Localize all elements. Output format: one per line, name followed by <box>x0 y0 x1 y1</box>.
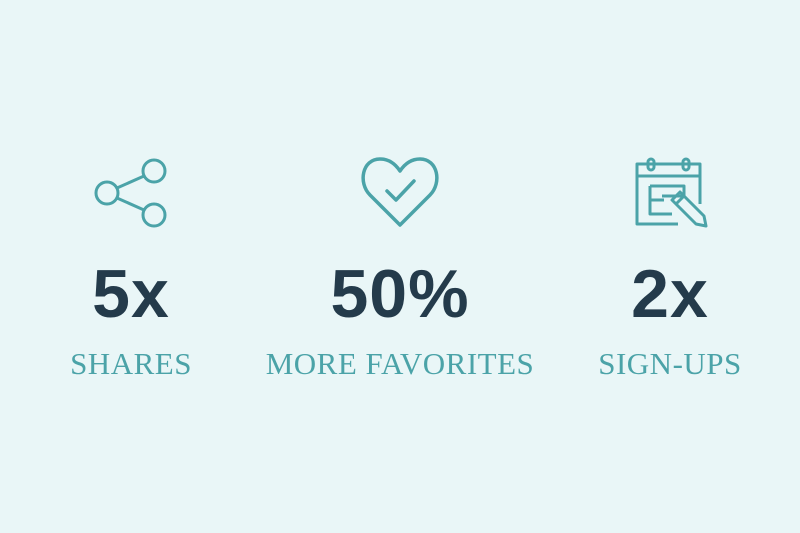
icon: heart with check <box>361 157 439 227</box>
icon: share <box>94 158 166 228</box>
label: more favorites: MORE FAVORITES <box>266 346 534 381</box>
label: shares: SHARES <box>70 346 192 381</box>
number: 5x: 5x <box>92 256 170 332</box>
label: sign-ups: SIGN-UPS <box>598 346 742 381</box>
stat: sign-ups <box>598 256 742 381</box>
icon: calendar with pencil <box>636 158 708 228</box>
stat: shares <box>70 256 192 381</box>
number: 2x: 2x <box>631 256 709 332</box>
number: 50%: 50% <box>330 256 470 332</box>
stat: favorites <box>266 256 534 381</box>
